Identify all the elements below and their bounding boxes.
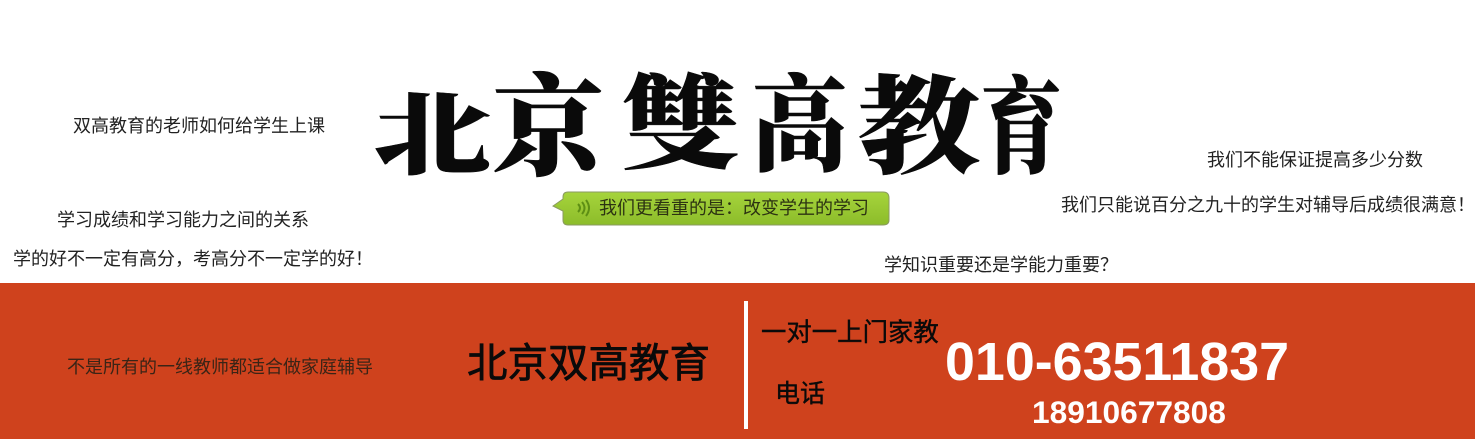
title: calligraphy brand name — [373, 40, 1062, 198]
title: calligraphy brand name: 高 — [752, 42, 847, 193]
text: one-on-one tutoring: 一对一上门家教 — [761, 319, 939, 347]
title: calligraphy brand name: 北 — [373, 63, 491, 193]
text: grades and ability: 学习成绩和学习能力之间的关系 — [57, 210, 309, 230]
text: phone number: 010-63511837 — [945, 332, 1289, 392]
heading: brand name: 北京双高教育 — [467, 340, 710, 386]
text: mobile number: 18910677808 — [1032, 394, 1226, 430]
divider: white vertical line — [744, 301, 748, 429]
text: satisfaction rate: 我们只能说百分之九十的学生对辅导后成绩很满意！ — [1061, 195, 1475, 215]
text: knowledge or ability: 学知识重要还是学能力重要？ — [884, 255, 1118, 275]
title: calligraphy brand name: 育 — [980, 44, 1062, 195]
title: calligraphy brand name: 京 — [492, 40, 604, 198]
title: calligraphy brand name: 教 — [858, 41, 980, 196]
text: good learners and high scores: 学的好不一定有高分，考高分不一定学的好！ — [13, 249, 373, 269]
text: phone label: 电话 — [775, 380, 825, 408]
text: how teachers teach: 双高教育的老师如何给学生上课 — [73, 116, 325, 136]
callout: green speech bubble: 我们更看重的是：改变学生的学习 — [599, 198, 869, 218]
callout: green speech bubble — [552, 192, 890, 226]
panel: red contact band — [0, 283, 1475, 439]
title: calligraphy brand name: 雙 — [622, 41, 739, 190]
text: not all teachers suit tutoring: 不是所有的一线教师都适合做家庭辅导 — [67, 357, 373, 377]
text: no guaranteed increase: 我们不能保证提高多少分数 — [1207, 150, 1423, 170]
